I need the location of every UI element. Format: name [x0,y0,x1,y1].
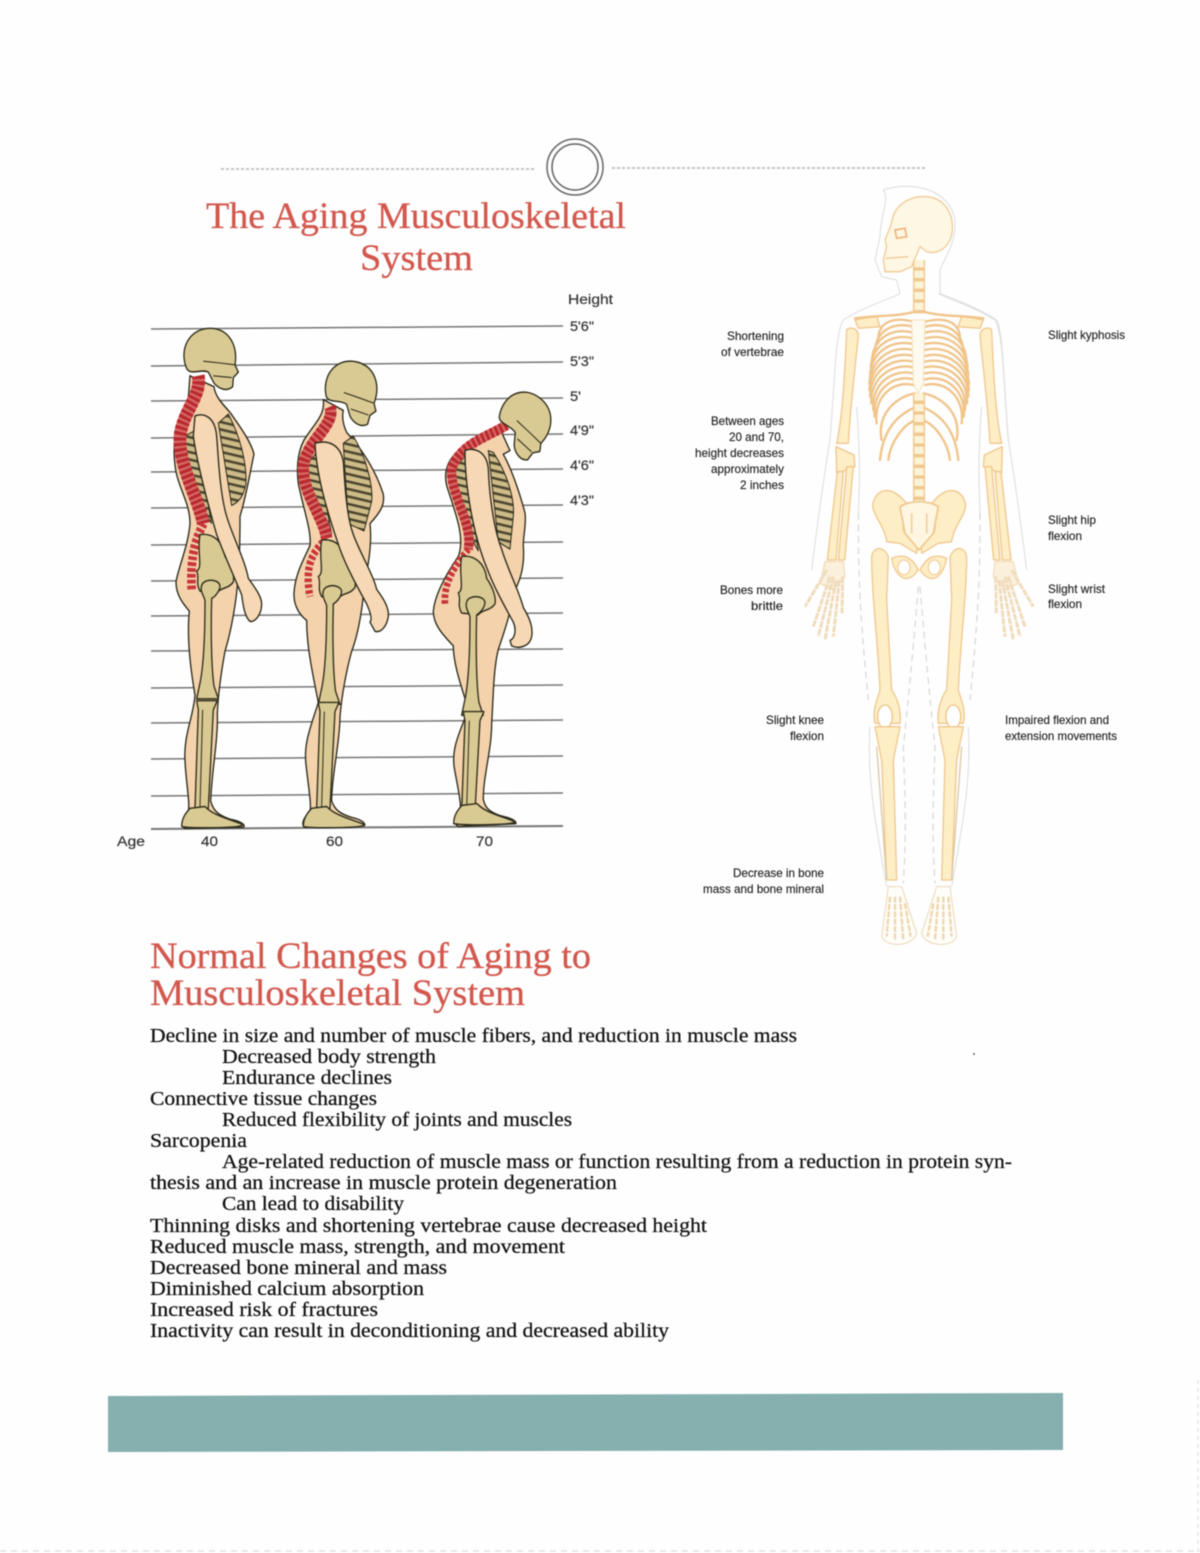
body text list: Can lead to disability [222,1193,404,1215]
figure: age 40 [174,328,262,828]
callout: slight wrist flexion: Slight wrist [1048,582,1106,596]
height labels: Height [568,291,613,307]
height labels: 4'6" [570,457,594,473]
age labels [117,833,493,849]
section heading: Musculoskeletal System [150,973,525,1014]
height labels: 5'6" [570,318,594,334]
callout: impaired movements [1005,713,1117,743]
decorative ring divider [221,139,925,195]
body text list: Increased risk of fractures [150,1299,378,1321]
head outline, skull and spine [875,186,1008,550]
callout: height decrease: height decreases [695,446,784,460]
callout: slight knee flexion: flexion [790,729,824,743]
callout: impaired movements: extension movements [1005,729,1117,743]
teal footer bar [108,1393,1063,1452]
callout: bones more brittle: Bones more [720,583,783,597]
callout: height decrease [695,414,784,492]
callout: slight wrist flexion [1048,582,1106,611]
body text list: Reduced muscle mass, strength, and movement [150,1236,565,1258]
height grid lines [151,326,563,829]
age labels: 70 [476,833,493,849]
figure: age 70 [433,381,563,827]
height labels [568,291,613,508]
callout: shortening of vertebrae: of vertebrae [721,345,784,359]
body text list: Decreased body strength [222,1046,436,1068]
body text list: Age-related reduction of muscle mass or function resulting from a reduction in protein syn- [222,1151,1012,1173]
title: System [360,238,473,279]
title [206,196,626,279]
body text list: Reduced flexibility of joints and muscles [222,1109,572,1131]
body text list: Decline in size and number of muscle fibers, and reduction in muscle mass [150,1025,797,1047]
callout: shortening of vertebrae [721,329,784,359]
callout: decrease in bone mass: mass and bone mineral [703,882,824,896]
body text list: Sarcopenia [150,1130,247,1152]
figure: age 60 [294,356,388,828]
title: The Aging Musculoskeletal [206,196,626,237]
right half of body and bones [920,293,1033,944]
callout: slight kyphosis: Slight kyphosis [1048,328,1125,342]
callout: slight hip flexion: flexion [1048,529,1082,543]
height labels: 5' [570,388,581,404]
height labels: 4'9" [570,422,594,438]
callout: shortening of vertebrae: Shortening [727,329,784,343]
left half of body and bones [805,293,918,944]
callout: decrease in bone mass [703,866,824,896]
body text list: Thinning disks and shortening vertebrae cause decreased height [150,1215,707,1237]
skeleton front view [805,186,1033,944]
callout: height decrease: approximately [711,462,784,476]
callout: slight hip flexion [1048,513,1096,543]
chart: height loss with age [117,291,613,849]
callout: slight wrist flexion: flexion [1048,597,1082,611]
body text list: Inactivity can result in deconditioning and decreased ability [150,1320,669,1342]
callout: slight knee flexion: Slight knee [766,713,824,727]
body text list: Connective tissue changes [150,1088,377,1110]
callout: height decrease: Between ages [711,414,784,428]
callout: slight hip flexion: Slight hip [1048,513,1096,527]
age labels: 60 [326,833,343,849]
body text list [150,1025,1012,1342]
body text list: thesis and an increase in muscle protein degeneration [150,1172,617,1194]
age labels: Age [117,833,145,849]
callout: impaired movements: Impaired flexion and [1005,713,1109,727]
callout: height decrease: 2 inches [740,478,784,492]
callout: decrease in bone mass: Decrease in bone [733,866,824,880]
height labels: 5'3" [570,353,594,369]
section heading: Normal Changes of Aging to [150,936,591,977]
height labels: 4'3" [570,492,594,508]
callout: height decrease: 20 and 70, [729,430,784,444]
callout: slight knee flexion [766,713,824,743]
callout: bones more brittle: brittle [751,599,783,613]
body text list: Endurance declines [222,1067,392,1089]
body text list: Diminished calcium absorption [150,1278,424,1300]
section heading [150,936,591,1014]
body text list: Decreased bone mineral and mass [150,1257,447,1279]
callout: bones more brittle [720,583,783,613]
age labels: 40 [201,833,218,849]
